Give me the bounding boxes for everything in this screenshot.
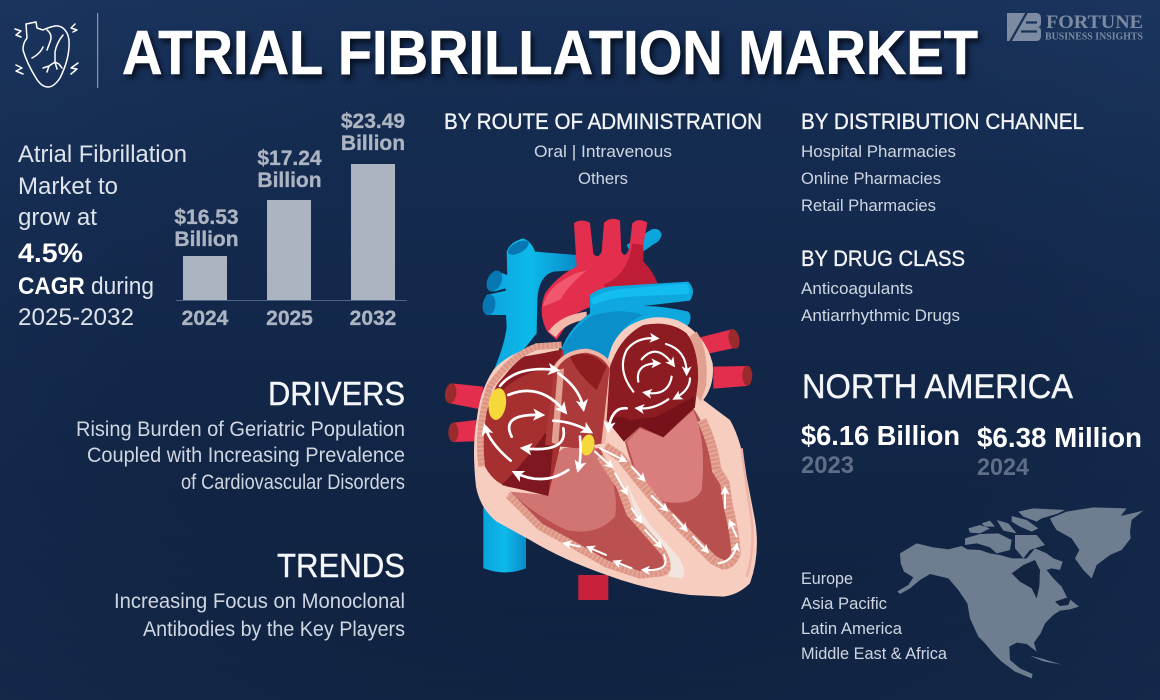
header divider xyxy=(97,13,98,88)
bar 2024 xyxy=(174,206,239,330)
CAGR text block: Market to xyxy=(18,173,118,200)
drivers: Coupled with Increasing Prevalence xyxy=(87,444,405,467)
other regions list: Latin America xyxy=(801,619,903,638)
left atrium chamber xyxy=(607,324,707,442)
left ventricle chamber xyxy=(605,408,738,565)
bar 2025: Billion xyxy=(257,169,322,192)
trends: TRENDS xyxy=(277,547,405,584)
by drug class xyxy=(801,246,965,325)
icon: heart outline with sparks xyxy=(15,22,78,87)
sinoatrial node xyxy=(487,387,508,421)
pulmonary veins left xyxy=(444,383,483,442)
trends: Antibodies by the Key Players xyxy=(143,618,405,641)
by route of administration: BY ROUTE OF ADMINISTRATION xyxy=(444,109,762,134)
bar 2032: Billion xyxy=(341,132,405,155)
signal arrows: right atrium xyxy=(485,369,627,479)
superior vena cava xyxy=(481,238,577,387)
bar chart: market size xyxy=(174,110,407,330)
septum highlight xyxy=(625,478,684,578)
by drug class: Antiarrhythmic Drugs xyxy=(801,306,960,325)
right atrium chamber xyxy=(480,345,563,496)
by distribution channel: Online Pharmacies xyxy=(801,169,941,188)
bar 2032: $23.49 xyxy=(341,110,405,133)
bar 2024: 2024 xyxy=(182,307,229,330)
logo mark xyxy=(1007,12,1041,42)
by distribution channel: Retail Pharmacies xyxy=(801,196,936,215)
aortic root xyxy=(545,351,612,448)
title: ATRIAL FIBRILLATION MARKET xyxy=(122,19,978,88)
pulmonary artery rear branch xyxy=(627,229,662,258)
logo: Fortune Business Insights xyxy=(1007,12,1143,42)
CAGR text block: Atrial Fibrillation xyxy=(18,141,187,168)
aorta xyxy=(542,219,657,340)
by route of administration: Others xyxy=(578,169,628,188)
atrioventricular node xyxy=(579,433,596,457)
signal arrows: left atrium rings xyxy=(623,338,690,409)
CAGR text block: CAGR during xyxy=(18,273,154,300)
other regions list: Europe xyxy=(801,569,853,588)
bar 2024: $16.53 xyxy=(174,206,239,229)
drivers: of Cardiovascular Disorders xyxy=(181,471,405,494)
by distribution channel: Hospital Pharmacies xyxy=(801,142,956,161)
map: North America xyxy=(897,507,1143,678)
logo wordmark: BUSINESS INSIGHTS xyxy=(1045,32,1143,42)
drivers: Rising Burden of Geriatric Population xyxy=(76,418,405,441)
drivers: DRIVERS xyxy=(268,375,405,412)
by distribution channel: BY DISTRIBUTION CHANNEL xyxy=(801,109,1084,134)
bar 2025: 2025 xyxy=(266,307,313,330)
north america stats xyxy=(801,368,1142,481)
logo wordmark xyxy=(1045,12,1143,42)
by route of administration xyxy=(444,109,762,188)
by route of administration: Oral | Intravenous xyxy=(534,142,672,161)
CAGR text block xyxy=(18,141,187,331)
other regions list: Middle East & Africa xyxy=(801,644,948,663)
by drug class: Anticoagulants xyxy=(801,279,913,298)
CAGR text block: grow at xyxy=(18,204,97,231)
drivers xyxy=(76,375,405,494)
pulmonary artery xyxy=(558,282,693,365)
trends: Increasing Focus on Monoclonal xyxy=(114,590,405,613)
north america stats: $6.38 Million xyxy=(977,422,1142,453)
descending artery stub xyxy=(578,575,608,600)
trends xyxy=(114,547,405,641)
north america stats: 2023 xyxy=(801,452,854,479)
other regions list: Asia Pacific xyxy=(801,594,887,613)
north america stats: $6.16 Billion xyxy=(801,420,960,451)
pulmonary veins right xyxy=(700,328,752,389)
bar 2032: 2032 xyxy=(350,307,396,330)
by distribution channel xyxy=(801,109,1084,215)
bar 2032 xyxy=(341,110,405,330)
other regions list xyxy=(801,569,948,663)
illustration: heart anatomy xyxy=(444,219,757,600)
logo wordmark: FORTUNE xyxy=(1046,12,1143,33)
bar 2025 xyxy=(257,147,322,330)
north america stats: NORTH AMERICA xyxy=(802,368,1073,406)
heart body xyxy=(474,317,757,597)
north america stats: 2024 xyxy=(977,454,1030,481)
bar 2024: Billion xyxy=(174,228,239,251)
CAGR text block: 2025-2032 xyxy=(18,304,134,331)
bar 2025: $17.24 xyxy=(257,147,322,170)
right ventricle chamber xyxy=(508,445,668,578)
CAGR text block: 4.5% xyxy=(18,238,83,268)
signal arrows: conduction along septum and walls xyxy=(565,448,737,570)
by drug class: BY DRUG CLASS xyxy=(801,246,965,271)
inferior vena cava xyxy=(483,507,526,572)
